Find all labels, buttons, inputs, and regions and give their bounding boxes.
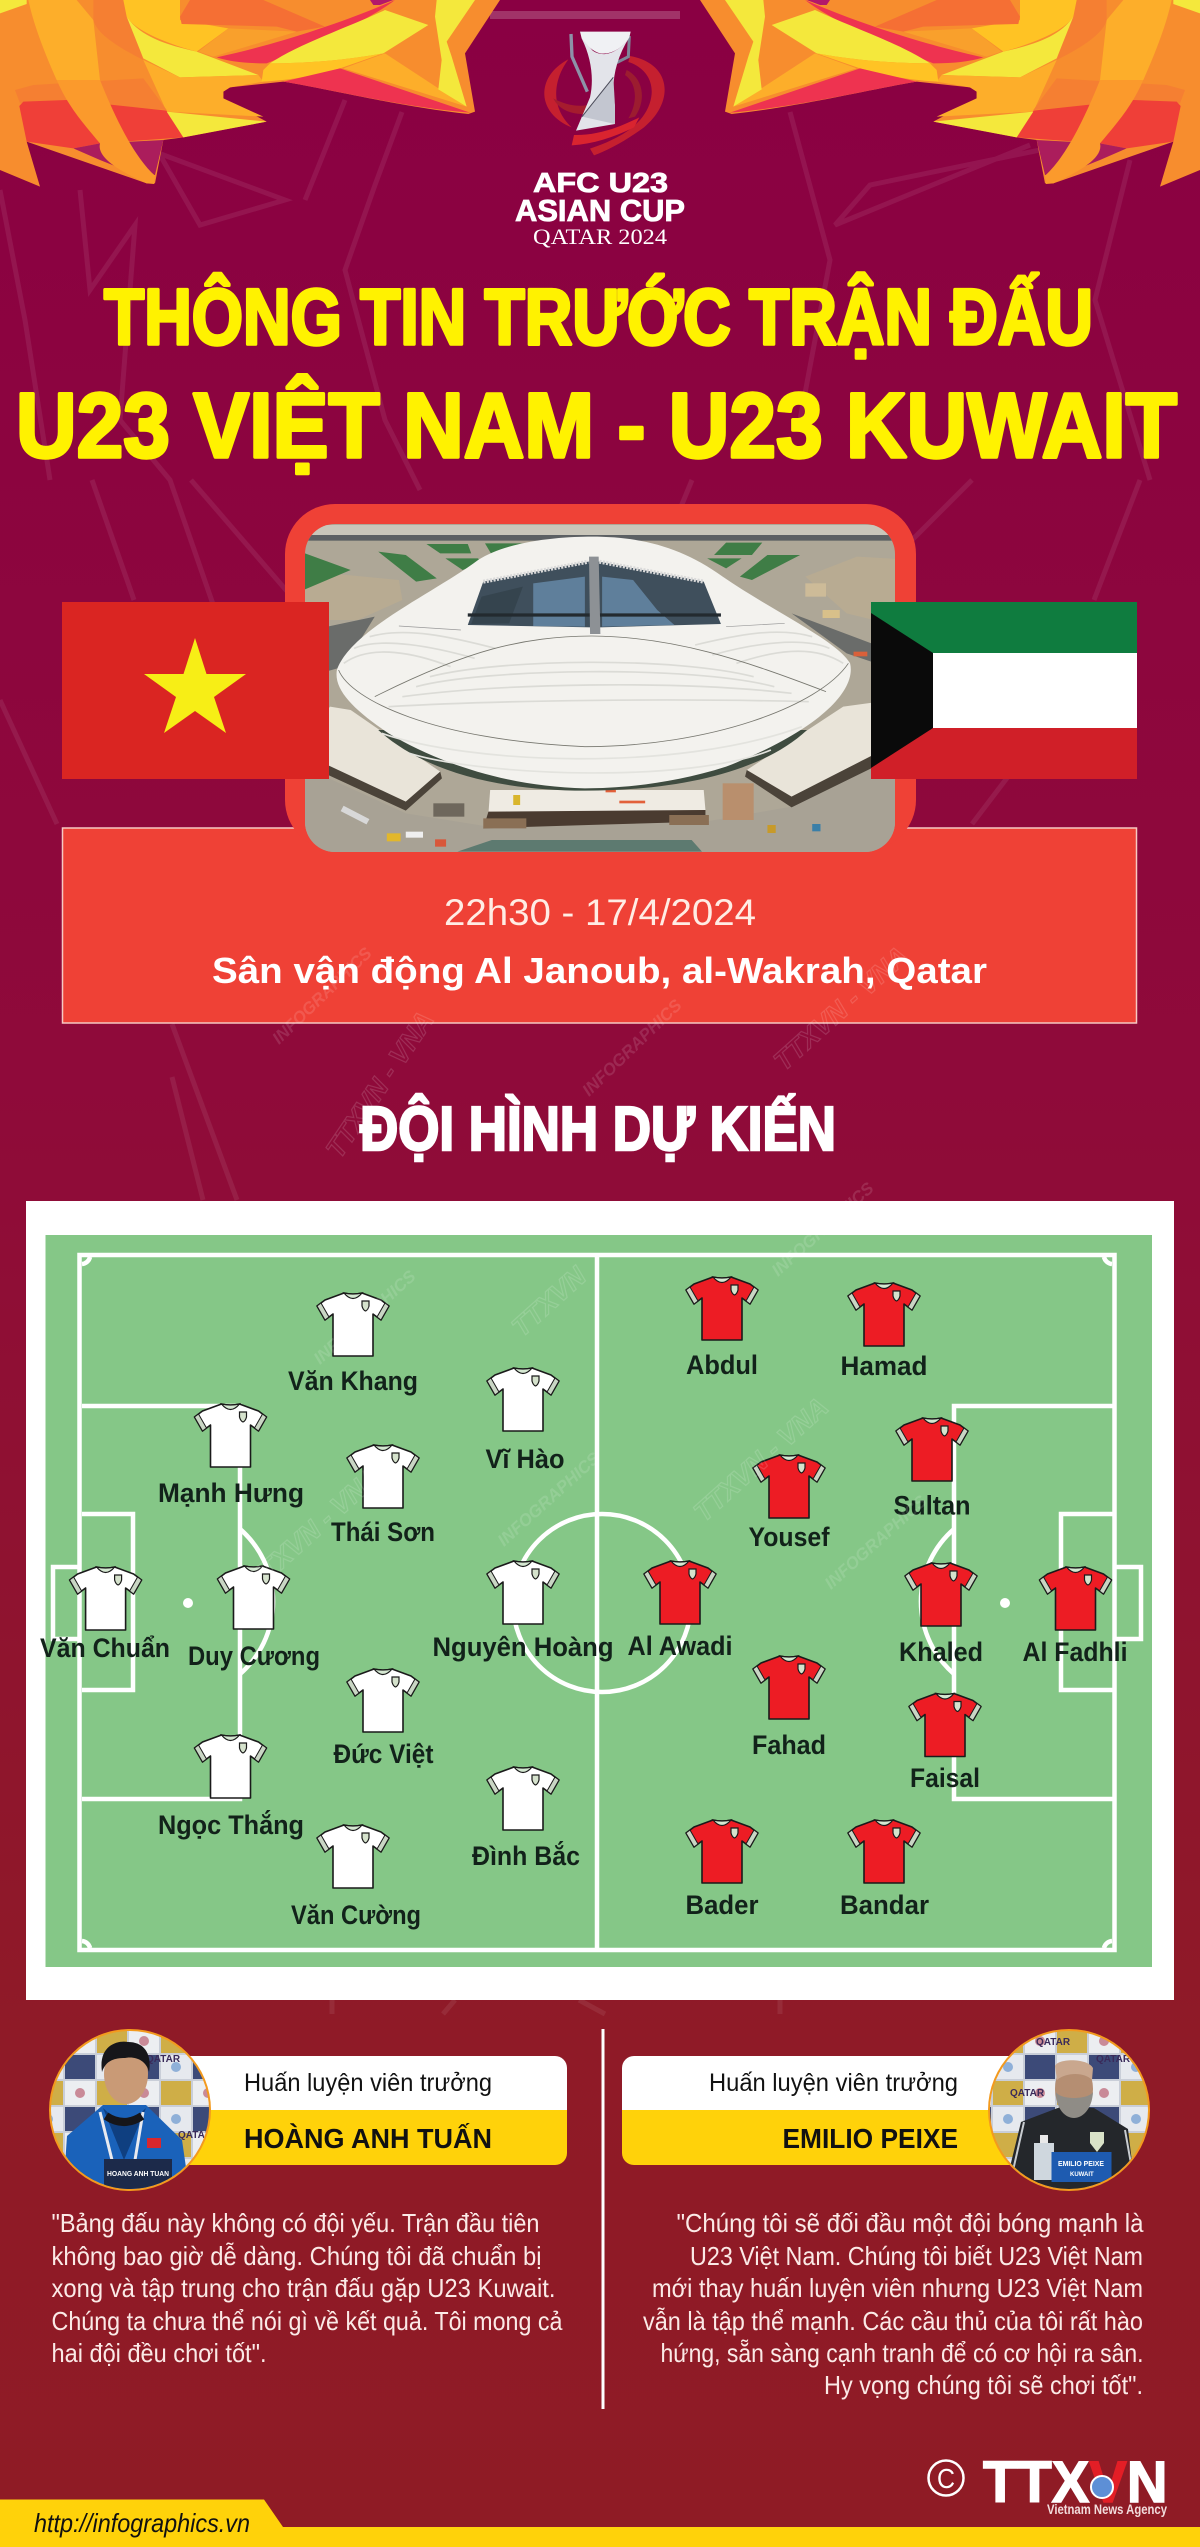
copyright mark: C bbox=[937, 2463, 955, 2494]
match time: 22h30 - 17/4/2024 bbox=[444, 892, 756, 933]
team: Vietnam lineup bbox=[40, 1293, 614, 1930]
divider bbox=[602, 2029, 604, 2409]
portrait: QATAR bbox=[1010, 2088, 1045, 2099]
right wing roof bbox=[747, 702, 871, 796]
roof opening bbox=[468, 562, 721, 627]
wordmark: TTXVN bbox=[983, 2450, 1168, 2515]
quote: xong và tập trung cho trận đấu gặp U23 Kuwait. bbox=[52, 2273, 556, 2303]
player: Khaled: Khaled bbox=[899, 1637, 983, 1667]
construction debris bbox=[341, 583, 867, 847]
watermarks: TTXVN - VNA bbox=[320, 1006, 440, 1163]
player: Văn Chuẩn bbox=[40, 1567, 170, 1663]
player: Bandar bbox=[840, 1820, 929, 1920]
player: Văn Cường bbox=[291, 1825, 421, 1930]
name banner: HOÀNG ANH TUẤN bbox=[244, 2123, 492, 2154]
player: Bader bbox=[686, 1820, 759, 1920]
watermarks: INFOGRAPHICS bbox=[269, 943, 376, 1048]
player: Vĩ Hào bbox=[486, 1368, 564, 1474]
penalty spots bbox=[183, 1598, 193, 1608]
portrait: EMILIO PEIXE bbox=[1058, 2159, 1104, 2168]
footer bar bbox=[0, 2500, 1200, 2547]
player: Mạnh Hưng bbox=[158, 1404, 304, 1508]
watermarks: INFOGRAPHICS bbox=[310, 1266, 420, 1368]
panel: match info bbox=[62, 828, 1136, 1023]
player: Al Awadi: Al Awadi bbox=[628, 1631, 732, 1661]
center truss bbox=[589, 557, 600, 634]
player: Faisal bbox=[909, 1694, 981, 1793]
quote: mới thay huấn luyện viên nhưng U23 Việt Nam bbox=[652, 2273, 1143, 2303]
AFC U23 Asian Cup logo bbox=[515, 32, 685, 249]
watermarks bbox=[241, 941, 931, 1596]
player: Ngọc Thắng bbox=[158, 1735, 304, 1840]
icon: yellow star bbox=[144, 638, 246, 733]
left wing roof bbox=[329, 706, 440, 802]
player: Hamad: Hamad bbox=[840, 1351, 928, 1381]
portrait bbox=[985, 2025, 1155, 2195]
player: Duy Cương bbox=[188, 1566, 320, 1671]
team: Kuwait lineup bbox=[628, 1277, 1128, 1920]
player: Mạnh Hưng: Mạnh Hưng bbox=[158, 1478, 304, 1508]
player: Fahad: Fahad bbox=[752, 1730, 826, 1760]
grass patches bbox=[296, 543, 800, 593]
TTXVN logo bbox=[928, 2450, 1168, 2517]
agency name: Vietnam News Agency bbox=[1047, 2502, 1167, 2517]
player: Đình Bắc: Đình Bắc bbox=[472, 1840, 580, 1871]
player: Khaled bbox=[899, 1563, 983, 1667]
quote: U23 Việt Nam. Chúng tôi biết U23 Việt Nam bbox=[690, 2241, 1143, 2271]
quote: hứng, sẵn sàng cạnh tranh để có cơ hội ra sân. bbox=[660, 2338, 1144, 2368]
player: Hamad bbox=[840, 1283, 928, 1381]
player: Văn Cường: Văn Cường bbox=[291, 1900, 421, 1930]
watermarks: TTXVN - VNA bbox=[241, 1461, 387, 1596]
name banner: Huấn luyện viên trưởng bbox=[244, 2069, 492, 2097]
name banner: EMILIO PEIXE bbox=[782, 2123, 958, 2154]
AFC U23 Asian Cup logo: ASIAN CUP bbox=[515, 193, 685, 228]
player: Abdul: Abdul bbox=[686, 1350, 758, 1380]
player: Thái Sơn: Thái Sơn bbox=[331, 1517, 435, 1547]
player: Sultan bbox=[894, 1418, 970, 1520]
background line pattern bbox=[0, 15, 1150, 2014]
portrait: QATAR bbox=[178, 2130, 213, 2141]
quote: "Bảng đấu này không có đội yếu. Trận đầu tiên bbox=[52, 2208, 540, 2238]
player: Fahad bbox=[752, 1656, 826, 1760]
watermarks: INFOGRAPHICS bbox=[494, 1448, 604, 1550]
portrait: HOANG ANH TUAN bbox=[107, 2169, 169, 2178]
quote: Chúng ta chưa thể nói gì về kết quả. Tôi mong cả bbox=[52, 2306, 563, 2336]
front building bbox=[488, 790, 705, 813]
icon: trophy bbox=[544, 32, 665, 155]
quote bbox=[643, 2208, 1144, 2400]
stadium shell bbox=[337, 537, 851, 788]
watermarks: TTXVN - VNA bbox=[688, 1392, 834, 1527]
player: Đình Bắc bbox=[472, 1767, 580, 1871]
player: Thái Sơn bbox=[331, 1445, 435, 1547]
watermarks: TTXVN bbox=[506, 1261, 592, 1342]
quote: vẫn là tập thể mạnh. Các cầu thủ của tôi rất hào bbox=[643, 2306, 1143, 2336]
panel: pitch frame bbox=[26, 1201, 1174, 2000]
player: Nguyên Hoàng: Nguyên Hoàng bbox=[432, 1632, 614, 1662]
name banner bbox=[130, 2056, 567, 2165]
player: Nguyên Hoàng bbox=[432, 1561, 614, 1662]
watermarks: INFOGRAPHICS bbox=[821, 1491, 931, 1593]
logo text: AFC U23 bbox=[533, 167, 668, 198]
player: Vĩ Hào: Vĩ Hào bbox=[486, 1444, 564, 1474]
quote: Hy vọng chúng tôi sẽ chơi tốt". bbox=[824, 2370, 1143, 2400]
AFC U23 Asian Cup logo: QATAR 2024 bbox=[533, 224, 667, 249]
player: Yousef: Yousef bbox=[748, 1522, 830, 1552]
player: Bandar: Bandar bbox=[840, 1890, 929, 1920]
shell seams bbox=[339, 623, 848, 747]
ground bbox=[296, 520, 916, 860]
portrait: QATAR bbox=[146, 2054, 181, 2065]
watermarks: TTXVN - VNA bbox=[768, 941, 914, 1076]
player: Faisal: Faisal bbox=[910, 1763, 980, 1793]
panel: coach Emilio Peixe bbox=[622, 2025, 1155, 2400]
lower ground bbox=[305, 822, 895, 852]
copyright mark bbox=[928, 2460, 964, 2496]
portrait bbox=[45, 2025, 215, 2195]
portrait: QATAR bbox=[1036, 2037, 1071, 2048]
player: Abdul bbox=[686, 1277, 758, 1380]
player: Duy Cương: Duy Cương bbox=[188, 1641, 320, 1671]
stadium shadow bbox=[378, 730, 807, 791]
quote: không bao giờ dễ dàng. Chúng tôi đã chuẩn bị bbox=[52, 2241, 542, 2271]
watermarks: INFOGRAPHICS bbox=[579, 995, 686, 1100]
corner decoration: left flames bbox=[0, 0, 500, 187]
flag: Kuwait bbox=[871, 602, 1137, 779]
player: Bader: Bader bbox=[686, 1890, 759, 1920]
player: Văn Khang: Văn Khang bbox=[288, 1366, 418, 1396]
player: Al Fadhli: Al Fadhli bbox=[1022, 1637, 1128, 1667]
player: Sultan: Sultan bbox=[894, 1490, 970, 1520]
match venue: Sân vận động Al Janoub, al-Wakrah, Qatar bbox=[212, 950, 987, 991]
player: Văn Khang bbox=[288, 1293, 418, 1396]
flag: Vietnam bbox=[62, 602, 329, 779]
icon: globe bbox=[1091, 2476, 1113, 2498]
panel: coach Hoàng Anh Tuấn bbox=[45, 2025, 567, 2368]
watermarks: INFOGRAPHICS bbox=[768, 1178, 878, 1280]
player: Đức Việt bbox=[334, 1669, 434, 1769]
quote bbox=[52, 2208, 563, 2368]
player: Đức Việt: Đức Việt bbox=[334, 1739, 434, 1769]
stadium photo illustration bbox=[296, 520, 916, 860]
shell stripes bbox=[344, 632, 843, 773]
quote: hai đội đều chơi tốt". bbox=[52, 2338, 266, 2368]
name banner: Huấn luyện viên trưởng bbox=[709, 2069, 958, 2097]
player: Văn Chuẩn: Văn Chuẩn bbox=[40, 1633, 170, 1663]
player: Ngọc Thắng: Ngọc Thắng bbox=[158, 1809, 304, 1840]
quote: "Chúng tôi sẽ đối đầu một đội bóng mạnh là bbox=[676, 2208, 1144, 2238]
stadium frame bbox=[285, 504, 916, 850]
player: Al Awadi bbox=[628, 1561, 732, 1661]
corner decoration: right flames bbox=[700, 0, 1200, 187]
name banner bbox=[622, 2056, 1069, 2165]
player: Yousef bbox=[748, 1455, 830, 1552]
footer url: http://infographics.vn bbox=[34, 2508, 250, 2538]
title bbox=[16, 272, 1177, 477]
portrait: QATAR bbox=[1096, 2054, 1131, 2065]
heading: lineup: ĐỘI HÌNH DỰ KIẾN bbox=[360, 1095, 836, 1164]
portrait: KUWAIT bbox=[1070, 2172, 1094, 2178]
player: Al Fadhli bbox=[1022, 1567, 1128, 1667]
pitch markings bbox=[53, 1255, 1141, 1950]
pitch bbox=[46, 1235, 1152, 1967]
